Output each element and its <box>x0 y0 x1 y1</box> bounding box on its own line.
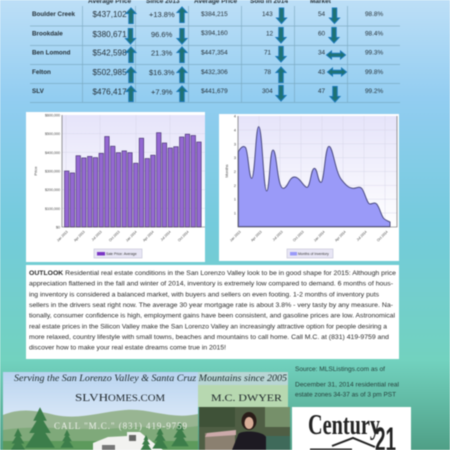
bar chart: sale price average: $500,000 <box>45 132 60 136</box>
source note <box>295 366 400 398</box>
bar chart: sale price average: $200,000 <box>45 188 60 192</box>
outlook text block <box>26 265 399 359</box>
market statistics table: 99.3% <box>365 50 383 56</box>
bar chart: sale price average: Jul 2014 <box>160 230 172 242</box>
chart legend <box>94 249 142 258</box>
area chart: months of inventory: Oct 2014 <box>376 230 389 242</box>
Century 21 logo <box>292 407 411 450</box>
market statistics table: Felton <box>32 69 51 76</box>
advertisement: M.C. Dwyer portrait <box>198 372 290 450</box>
chart legend <box>287 249 333 258</box>
market statistics table: +7.9% <box>151 88 173 96</box>
market statistics table: Boulder Creek <box>32 11 76 18</box>
market statistics table <box>30 0 400 102</box>
market statistics table: $384,215 <box>201 11 228 18</box>
area chart: months of inventory: 4 <box>234 128 236 132</box>
bar chart: sale price average: Apr 2013 <box>73 230 86 242</box>
area chart: months of inventory: Jul 2014 <box>356 230 368 242</box>
outlook text block: sellers in the drivers seat right now. The average 30 year mortgage rate is about 3.8% - very tasty by any measure. Na- <box>29 302 393 309</box>
outlook text block: OUTLOOK Residential real estate conditions in the San Lorenzo Valley look to be in good shape for 2015: Although price <box>29 270 396 277</box>
chart legend: Months of Inventory <box>298 252 329 256</box>
name: M.C. DWYER <box>211 394 283 404</box>
area chart: months of inventory <box>219 114 399 261</box>
market statistics table: SLV <box>32 88 45 95</box>
chart legend: Sale Price: Average <box>106 252 137 256</box>
market statistics table: 34 <box>318 50 326 56</box>
market statistics table: 99.8% <box>365 69 383 76</box>
bar chart: sale price average: Price <box>33 166 38 176</box>
bar chart: sale price average: Apr 2014 <box>142 230 155 242</box>
market statistics table: 96.6% <box>151 30 173 39</box>
area chart: months of inventory: 4 <box>234 114 236 118</box>
outlook text block: real estate prices in the Silicon Valley make the San Lorenzo Valley an increasingly attractive option for people desiring a <box>29 323 387 330</box>
area chart: months of inventory: 3 <box>234 142 236 146</box>
market statistics table: 54 <box>318 11 326 18</box>
market statistics table: 60 <box>318 30 326 38</box>
area chart: months of inventory: Jul 2013 <box>272 230 284 242</box>
outlook text block: tionally, consumer confidence is high, employment gains have been consistent, and gasoline prices are low. Astronomical <box>29 313 395 320</box>
market statistics table: Brookdale <box>32 30 63 38</box>
bar chart: sale price average: $300,000 <box>45 170 60 174</box>
market statistics table: 43 <box>318 69 326 76</box>
area chart: months of inventory: Jan 2013 <box>229 230 242 243</box>
bar chart: sale price average <box>26 112 205 262</box>
market statistics table: +13.8% <box>149 10 175 19</box>
area chart: months of inventory: Apr 2014 <box>334 230 347 242</box>
market statistics table: $476,417 <box>92 88 127 96</box>
pine trees <box>9 407 189 450</box>
outlook text block: ing inventory is considered a balanced market, with buyers and sellers on even footing. 1-2 months of inventory puts <box>29 291 380 298</box>
market statistics table: $437,102 <box>92 10 127 19</box>
bar chart: sale price average: Jan 2013 <box>56 230 69 243</box>
bar chart: sale price average: Jul 2013 <box>91 230 103 242</box>
market statistics table: $432,306 <box>201 69 228 76</box>
market statistics table: 99.2% <box>365 88 383 95</box>
outlook text block: discover how to make your real estate dreams come true in 2015! <box>29 345 226 352</box>
market statistics table: 71 <box>264 50 272 56</box>
bar chart: sale price average: Jan 2014 <box>125 230 138 243</box>
phone: CALL "M.C." (831) 419-9759 <box>54 421 188 431</box>
market statistics table: 21.3% <box>151 48 173 58</box>
source note: December 31, 2014 residential real <box>295 382 400 388</box>
area chart: months of inventory: 3 <box>234 156 236 160</box>
bar chart: sale price average: $400,000 <box>45 151 60 155</box>
market statistics table: 98.8% <box>365 11 383 18</box>
area chart: months of inventory: Months <box>224 164 229 178</box>
market statistics table: Ben Lomond <box>32 50 71 56</box>
bar chart: sale price average: Oct 2014 <box>177 230 190 242</box>
market statistics table: 304 <box>262 88 273 95</box>
outlook text block: appreciation flattened in the fall and winter of 2014, inventory is extremely low compared to demand. 6 months of hous- <box>29 281 393 288</box>
market statistics table: 47 <box>318 88 326 95</box>
area chart: months of inventory: 2 <box>234 184 236 188</box>
bar chart: sale price average: Oct 2013 <box>108 230 121 242</box>
market statistics table: $447,354 <box>201 50 228 56</box>
bar chart: sale price average: $0 <box>56 226 60 230</box>
market statistics table: $394,160 <box>201 30 228 37</box>
tagline: Serving the San Lorenzo Valley & Santa Cruz Mountains since 2005 <box>14 373 287 384</box>
market statistics table: $502,985 <box>92 68 127 77</box>
area chart: months of inventory: Oct 2013 <box>292 230 305 242</box>
website: SLVH OMES.COM <box>75 392 165 404</box>
source note: Source: MLSListings.com as of <box>295 366 385 373</box>
house <box>93 432 163 450</box>
area chart: months of inventory: Apr 2013 <box>250 230 263 242</box>
market statistics table: $380,671 <box>92 30 127 39</box>
area chart: months of inventory: Jan 2014 <box>313 230 326 243</box>
market statistics table: $441,679 <box>201 88 228 95</box>
area chart: months of inventory: 2 <box>234 170 236 174</box>
advertisement: SLVHomes banner <box>3 372 198 450</box>
bar chart: sale price average: $100,000 <box>45 207 60 211</box>
photo <box>199 407 290 450</box>
Century 21 logo: Century <box>308 410 380 441</box>
source note: estate zones 34-37 as of 3 pm PST <box>295 392 396 398</box>
market statistics table: 12 <box>266 30 274 38</box>
outlook text block: more relaxed, country lifestyle with small towns, beaches and mountains to call home. Call M.C. at (831) 419-9759 and <box>29 334 389 341</box>
market statistics table: $16.3% <box>149 68 175 77</box>
area chart: months of inventory: 1 <box>234 198 236 202</box>
market statistics table: $542,598 <box>92 48 127 58</box>
market statistics table: 78 <box>264 69 272 76</box>
area chart: months of inventory: 1 <box>234 212 236 216</box>
bar chart: sale price average: $600,000 <box>45 114 60 118</box>
market statistics table: 98.4% <box>365 30 383 38</box>
market statistics table: 143 <box>262 11 273 18</box>
